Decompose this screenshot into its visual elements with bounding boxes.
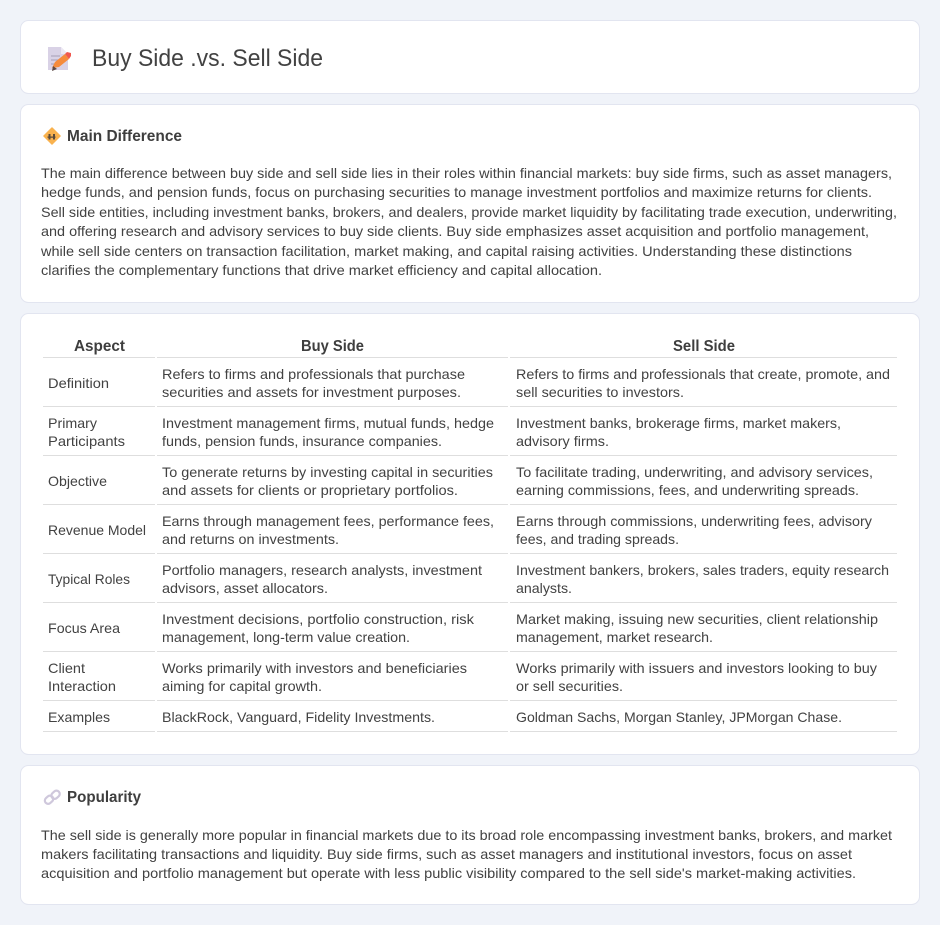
row: focus area: management, market research. bbox=[516, 629, 713, 645]
row: focus area: Focus Area bbox=[48, 620, 120, 636]
row: client interaction: Interaction bbox=[48, 678, 116, 694]
table header row bbox=[74, 338, 735, 355]
row: primary participants: Investment banks, brokerage firms, market makers, bbox=[516, 415, 841, 431]
text block: main difference paragraph: while sell side centers on transaction facilitation, market making, and capital raising activities. Understanding these distinctions bbox=[40, 243, 852, 259]
row: typical roles: analysts. bbox=[516, 580, 572, 596]
row: focus area bbox=[48, 611, 878, 645]
text block: main difference paragraph: Sell side entities, including investment banks, brokers, and dealers, provide market liquidity by facilitating trade execution, underwriting, bbox=[41, 204, 897, 220]
row: primary participants: funds, pension funds, insurance companies. bbox=[162, 433, 442, 449]
row: primary participants: advisory firms. bbox=[516, 433, 609, 449]
text block: main difference paragraph: clarifies the complementary functions that drive market efficiency and capital allocation. bbox=[41, 262, 602, 278]
row: revenue model: Earns through management fees, performance fees, bbox=[162, 513, 494, 529]
table header row: Buy Side bbox=[301, 338, 364, 355]
row: definition: Refers to firms and professionals that create, promote, and bbox=[516, 366, 890, 382]
row: objective: and assets for clients or proprietary portfolios. bbox=[162, 482, 458, 498]
row: examples bbox=[48, 709, 842, 725]
row: examples: Goldman Sachs, Morgan Stanley, JPMorgan Chase. bbox=[516, 709, 842, 725]
row: typical roles: Typical Roles bbox=[48, 571, 130, 587]
row: focus area: Market making, issuing new securities, client relationship bbox=[516, 611, 878, 627]
row: objective: Objective bbox=[48, 473, 107, 489]
row: revenue model: Earns through commissions, underwriting fees, advisory bbox=[516, 513, 872, 529]
row: typical roles: Investment bankers, brokers, sales traders, equity research bbox=[516, 562, 889, 578]
row: primary participants: Participants bbox=[48, 433, 125, 449]
row: objective bbox=[48, 464, 873, 498]
text block: popularity paragraph: The sell side is generally more popular in financial markets due to its broad role encompassing investment banks, brokers, and market bbox=[41, 827, 892, 843]
table header row: Sell Side bbox=[673, 338, 735, 355]
panel: title header bbox=[20, 20, 920, 94]
row: revenue model bbox=[48, 513, 872, 547]
table header row: Aspect bbox=[74, 338, 126, 355]
row: revenue model: and returns on investments. bbox=[162, 531, 339, 547]
row: focus area: Investment decisions, portfolio construction, risk bbox=[162, 611, 475, 627]
row: definition: Refers to firms and professionals that purchase bbox=[162, 366, 465, 382]
panel: popularity bbox=[20, 766, 920, 904]
row: primary participants bbox=[48, 415, 841, 449]
row: revenue model: fees, and trading spreads. bbox=[516, 531, 679, 547]
text block: popularity paragraph: makers facilitating transactions and liquidity. Buy side firms, such as asset managers and institutional investors, focus on asset bbox=[41, 846, 852, 862]
title: Buy Side .vs. Sell Side bbox=[92, 45, 323, 72]
panel: comparison table bbox=[20, 314, 920, 754]
row: definition bbox=[48, 366, 890, 400]
text block: main difference paragraph: The main difference between buy side and sell side lies in their roles within financial markets: buy side firms, such as asset managers, bbox=[41, 165, 892, 181]
row: client interaction: Works primarily with investors and beneficiaries bbox=[162, 660, 467, 676]
text block: main difference paragraph: and offering research and advisory services to buy side clients. Buy side emphasizes asset acquisition and portfolio management, bbox=[41, 223, 869, 239]
icon: document with pencil bbox=[48, 47, 71, 71]
row: objective: To generate returns by investing capital in securities bbox=[162, 464, 493, 480]
row: client interaction: or sell securities. bbox=[516, 678, 623, 694]
text block: popularity paragraph: acquisition and portfolio management but operate with less public visibility compared to the sell side's market-making activities. bbox=[41, 865, 856, 881]
icon: chain link bbox=[44, 789, 61, 805]
row: typical roles bbox=[48, 562, 889, 596]
row: objective: To facilitate trading, underwriting, and advisory services, bbox=[516, 464, 873, 480]
row: definition: sell securities to investors. bbox=[516, 384, 684, 400]
row: client interaction bbox=[48, 660, 877, 694]
row: primary participants: Primary bbox=[48, 415, 97, 431]
row: typical roles: advisors, asset allocators. bbox=[162, 580, 328, 596]
row: definition: Definition bbox=[48, 375, 109, 391]
row: client interaction: Works primarily with issuers and investors looking to buy bbox=[516, 660, 877, 676]
row: typical roles: Portfolio managers, research analysts, investment bbox=[162, 562, 482, 578]
row: objective: earning commissions, fees, and underwriting spreads. bbox=[516, 482, 859, 498]
row: definition: securities and assets for investment purposes. bbox=[162, 384, 461, 400]
text block: main difference paragraph: hedge funds, and pension funds, focus on purchasing securities to manage investment portfolios and maximize returns for clients. bbox=[41, 184, 872, 200]
row: client interaction: aiming for capital growth. bbox=[162, 678, 322, 694]
text block: popularity paragraph bbox=[41, 827, 892, 881]
icon: orange diamond bbox=[44, 128, 60, 144]
heading: popularity: Popularity bbox=[67, 789, 141, 806]
row: examples: BlackRock, Vanguard, Fidelity Investments. bbox=[162, 709, 435, 725]
heading: main difference: Main Difference bbox=[67, 128, 182, 145]
row: revenue model: Revenue Model bbox=[48, 522, 146, 538]
row: examples: Examples bbox=[48, 709, 110, 725]
text block: main difference paragraph bbox=[40, 165, 897, 278]
row: focus area: management, long-term value creation. bbox=[162, 629, 410, 645]
row: client interaction: Client bbox=[48, 660, 85, 676]
panel: main difference bbox=[20, 104, 920, 302]
row: primary participants: Investment management firms, mutual funds, hedge bbox=[162, 415, 494, 431]
